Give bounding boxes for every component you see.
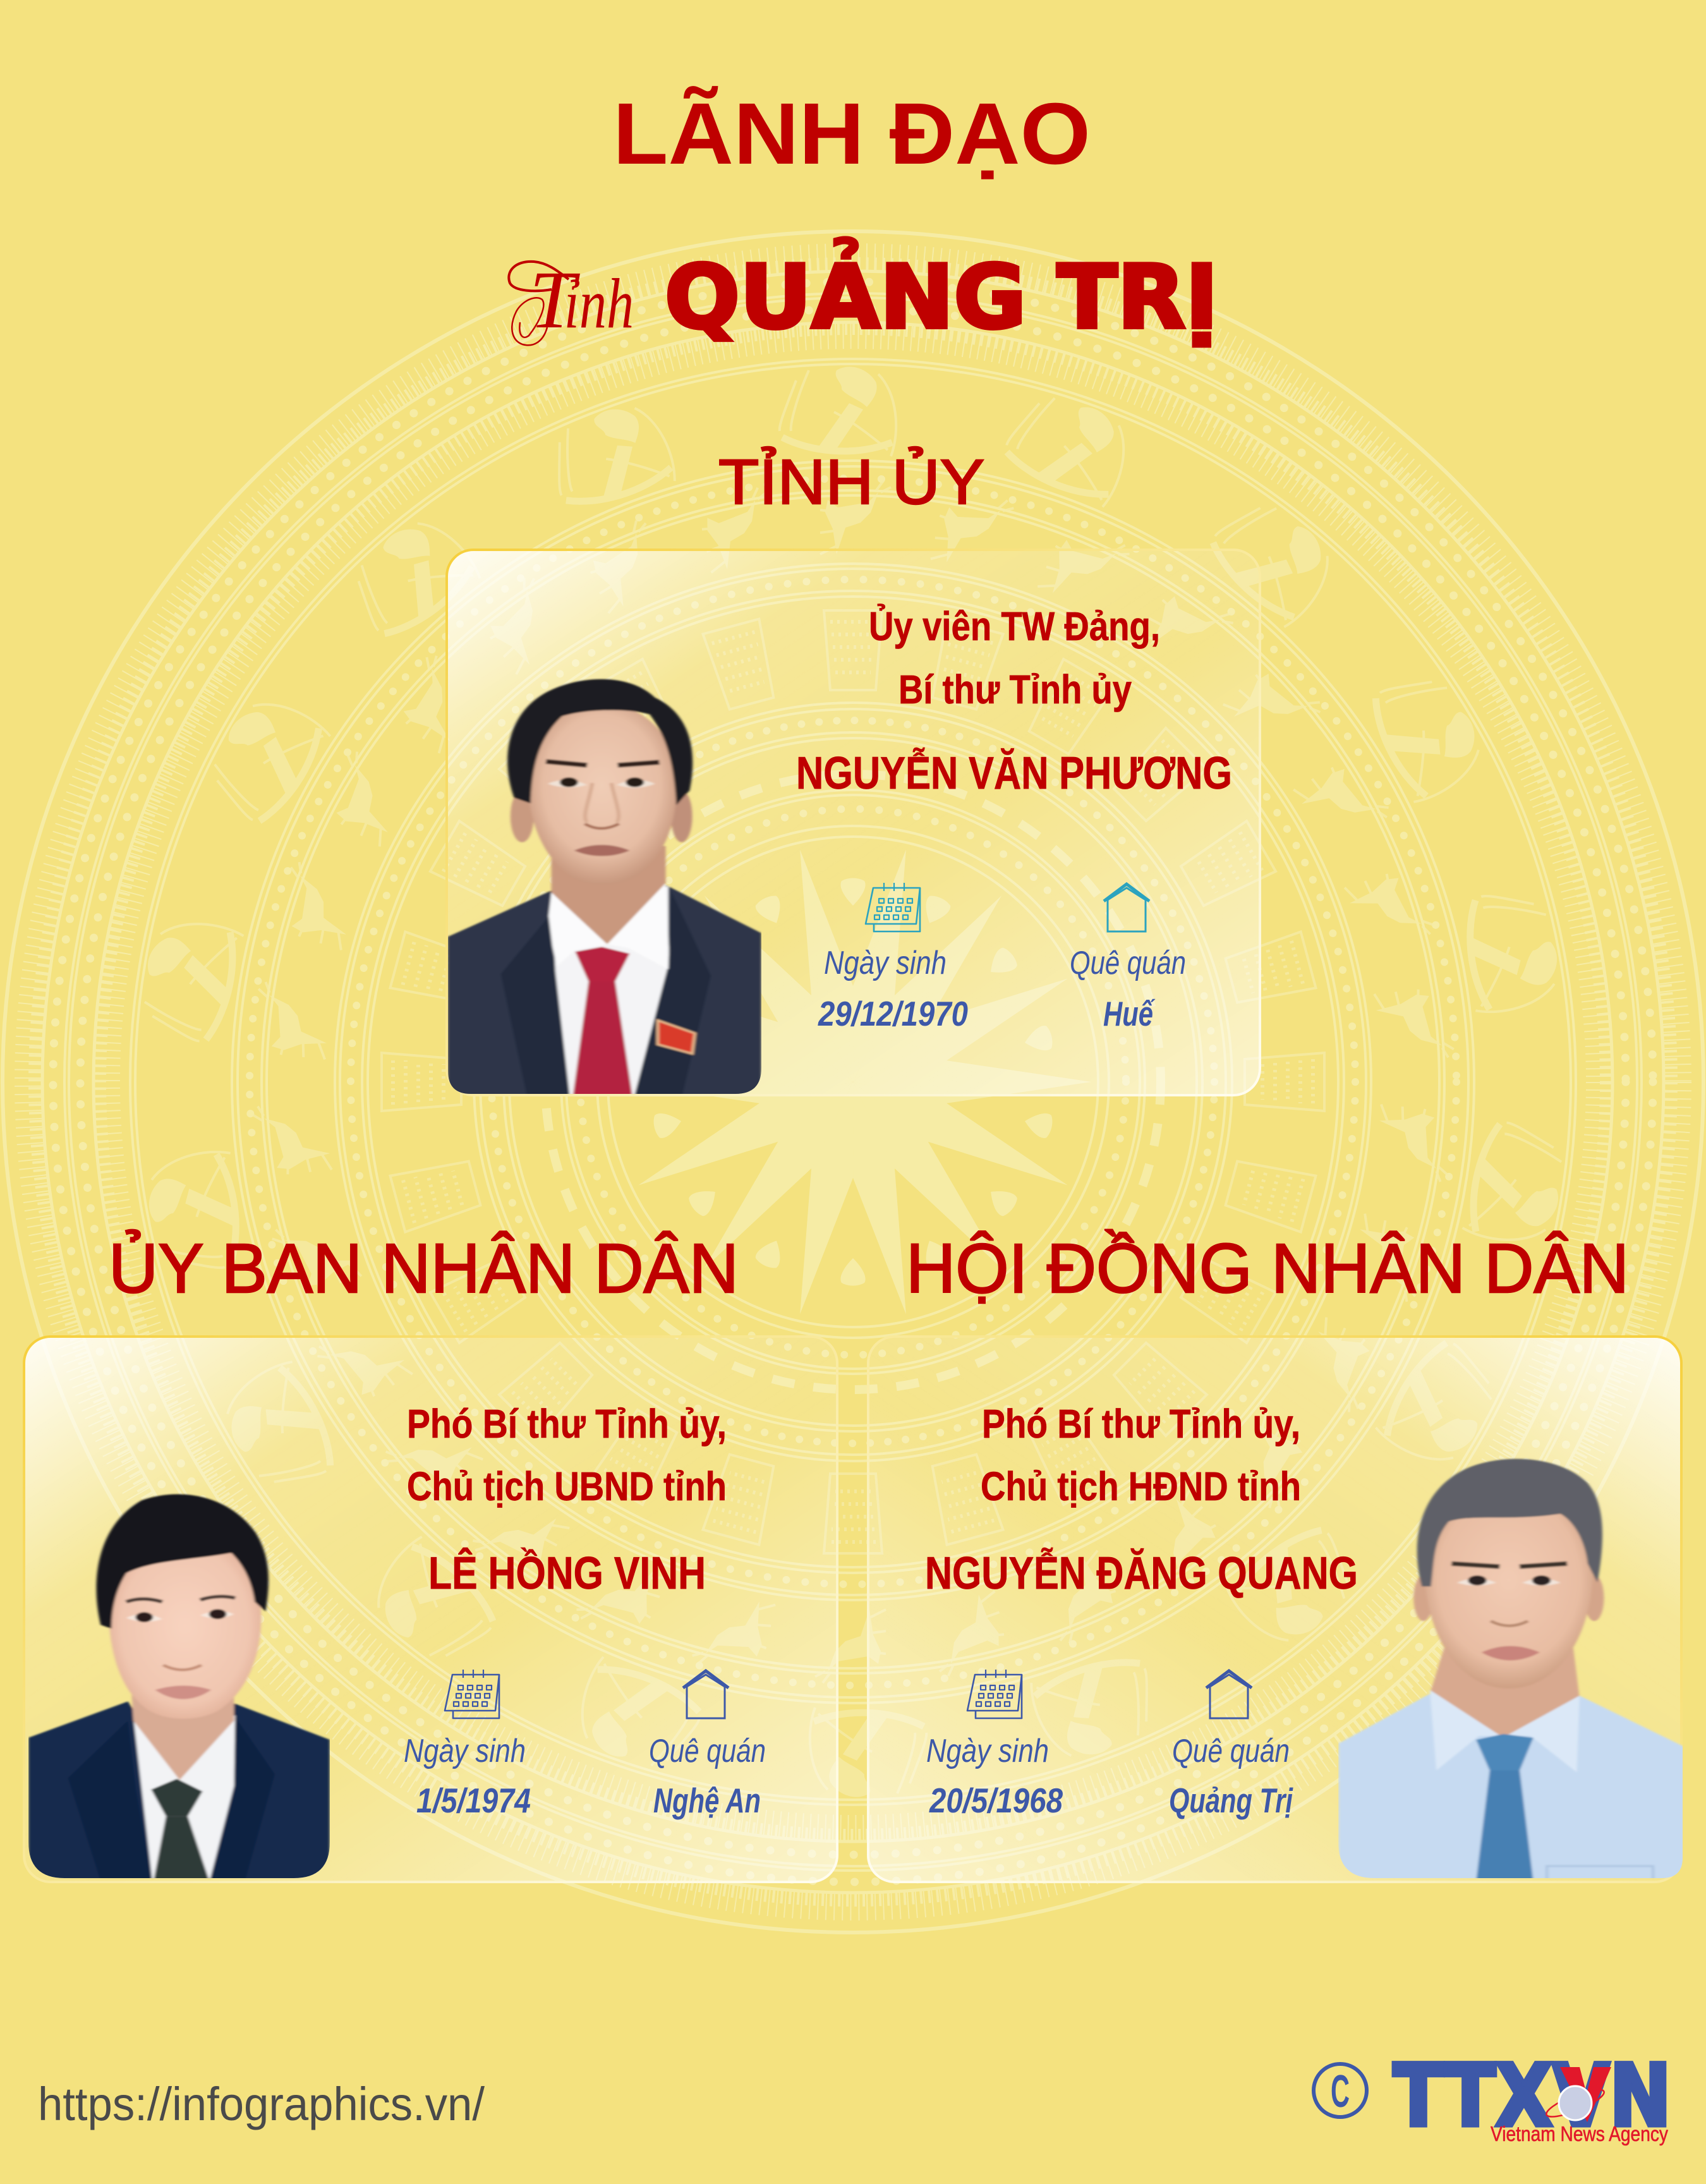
globe [1544, 2085, 1607, 2121]
birth date: 1/5/1974 [416, 1781, 531, 1820]
hometown [649, 1733, 766, 1820]
role: Bí thư Tỉnh ủy [898, 667, 1132, 712]
role [981, 1401, 1301, 1509]
birth date [404, 1733, 531, 1820]
icon: calendar [866, 883, 920, 931]
heading: ỦY BAN NHÂN DÂN: ỦY BAN NHÂN DÂN [109, 1230, 739, 1307]
bronze drum background pattern [3, 231, 1703, 1932]
birth date [926, 1733, 1063, 1820]
photo: Nguyễn Văn Phương [447, 679, 761, 1098]
icon: calendar [967, 1670, 1022, 1718]
birth date: Ngày sinh [404, 1733, 526, 1769]
role [407, 1401, 727, 1509]
heading: HỘI ĐỒNG NHÂN DÂN: HỘI ĐỒNG NHÂN DÂN [906, 1230, 1629, 1307]
script word Tỉnh [509, 255, 634, 346]
birth date: Ngày sinh [926, 1733, 1049, 1769]
subtitle: Tỉnh QUẢNG TRỊ [509, 238, 1218, 348]
footer url: https://infographics.vn/ [38, 2078, 485, 2130]
role: Chủ tịch HĐND tỉnh [981, 1464, 1301, 1509]
hometown: Quê quán [1070, 945, 1186, 981]
hometown: Quê quán [1172, 1733, 1290, 1769]
icon: copyright [1314, 2064, 1367, 2117]
hometown: Quảng Trị [1169, 1781, 1293, 1820]
hometown [1169, 1733, 1293, 1820]
logo: TTXVN [1393, 2046, 1671, 2145]
panel: Tỉnh ủy card [447, 550, 1260, 1098]
card background [868, 1337, 1681, 1882]
icon: house [1206, 1671, 1252, 1718]
red V [1560, 2067, 1611, 2122]
panel: HĐND card [868, 1337, 1686, 1882]
role: Chủ tịch UBND tỉnh [407, 1464, 727, 1509]
icon: house [683, 1671, 729, 1718]
birth date [818, 945, 968, 1033]
card background [24, 1337, 837, 1882]
card background [447, 550, 1260, 1095]
QUẢNG TRỊ: QUẢNG TRỊ [665, 238, 1218, 348]
tagline: Vietnam News Agency [1491, 2122, 1668, 2145]
photo: Lê Hồng Vinh [28, 1495, 330, 1881]
name: NGUYỄN VĂN PHƯƠNG [796, 748, 1232, 799]
role: Ủy viên TW Đảng, [869, 603, 1160, 649]
script word Tỉnh: T [529, 255, 575, 346]
wordmark: TTXVN [1393, 2046, 1671, 2145]
title: LÃNH ĐẠO: LÃNH ĐẠO [613, 85, 1091, 183]
name: LÊ HỒNG VINH [428, 1548, 706, 1599]
hometown: Quê quán [649, 1733, 766, 1769]
role: Phó Bí thư Tỉnh ủy, [407, 1401, 727, 1447]
birth date: Ngày sinh [824, 945, 947, 981]
birth date: 29/12/1970 [818, 994, 968, 1033]
icon: house [1104, 884, 1149, 931]
icon: copyright: C [1331, 2066, 1350, 2117]
photo: Nguyễn Đăng Quang [1338, 1459, 1686, 1881]
script word Tỉnh: ỉnh [564, 265, 634, 343]
name: NGUYỄN ĐĂNG QUANG [925, 1548, 1358, 1599]
hometown [1070, 945, 1186, 1033]
hometown: Nghệ An [653, 1781, 761, 1820]
birth date: 20/5/1968 [929, 1781, 1063, 1820]
heading: TỈNH ỦY: TỈNH ỦY [718, 446, 984, 518]
hometown: Huế [1103, 994, 1156, 1033]
panel: UBND card [24, 1337, 837, 1882]
role: Phó Bí thư Tỉnh ủy, [982, 1401, 1300, 1447]
role [869, 603, 1160, 712]
icon: calendar [445, 1670, 499, 1718]
